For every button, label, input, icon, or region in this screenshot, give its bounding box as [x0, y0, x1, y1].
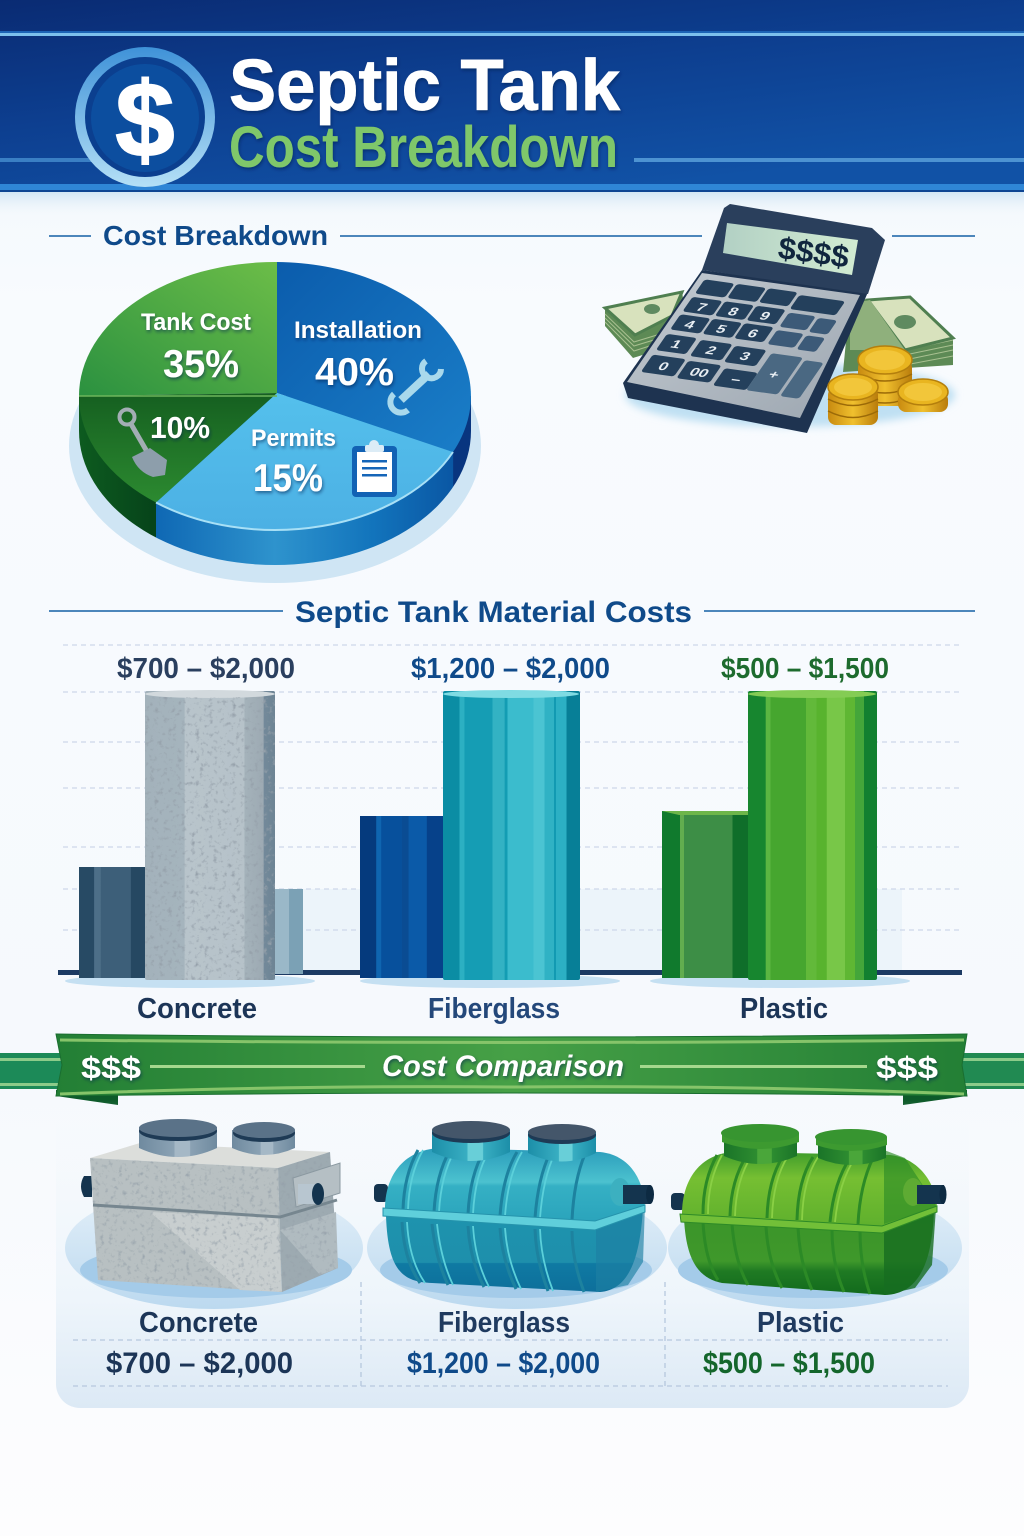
calculator keys: 8	[724, 306, 741, 319]
calculator keys: 2	[702, 344, 719, 358]
ribbon banner: cost comparison: Cost Comparison	[382, 1050, 624, 1083]
pie labels	[141, 309, 422, 500]
calculator keys: 3	[736, 350, 753, 363]
header banner	[0, 0, 1024, 192]
calculator keys	[638, 279, 866, 399]
comparison labels: fiberglass	[407, 1307, 600, 1380]
pie labels: 40%	[315, 351, 394, 394]
slice: other 10%	[79, 393, 277, 502]
calculator keys: −	[727, 374, 744, 387]
calculator keys: 7	[693, 301, 710, 314]
slice: installation 40%	[277, 262, 471, 452]
comparison labels: plastic: $500 – $1,500	[703, 1347, 875, 1380]
icon: dollar coin: $	[116, 61, 174, 179]
axis label: Plastic	[740, 993, 828, 1025]
calculator keys: 00	[686, 366, 712, 380]
calculator body	[623, 270, 868, 433]
illustration: fiberglass tank	[374, 1121, 654, 1292]
value label: $500 – $1,500	[721, 653, 889, 685]
section heading: cost breakdown: Cost Breakdown	[103, 220, 328, 251]
calculator keys: 9	[756, 310, 773, 323]
calculator keys: 0	[655, 361, 672, 374]
pie labels: Installation	[294, 317, 422, 344]
manhole lids	[139, 1119, 295, 1157]
comparison labels: plastic	[703, 1307, 875, 1380]
bars: fiberglass	[360, 653, 610, 1025]
pie labels: Permits	[251, 425, 336, 452]
calculator keys: 6	[744, 328, 761, 341]
illustration: concrete tank	[80, 1119, 350, 1300]
title: Septic Tank	[229, 46, 621, 126]
bars: concrete	[79, 653, 303, 1025]
illustration: calculator with cash and coins	[605, 204, 955, 433]
gold coins	[828, 346, 948, 425]
icon: wrench	[390, 361, 441, 413]
ribbon banner: cost comparison: $$$	[876, 1050, 938, 1085]
comparison labels: concrete	[106, 1307, 293, 1380]
value label: $1,200 – $2,000	[411, 653, 610, 685]
comparison labels: plastic: Plastic	[757, 1307, 844, 1339]
axis label: Concrete	[137, 993, 257, 1025]
pie labels: 35%	[163, 343, 239, 386]
bars: plastic	[662, 653, 889, 1025]
title: Cost Breakdown	[229, 115, 618, 180]
axis label: Fiberglass	[428, 993, 560, 1025]
calculator keys: 4	[681, 319, 699, 332]
ribbon banner: cost comparison	[0, 1034, 1024, 1105]
title	[229, 46, 621, 180]
illustration: calculator with cash and coins: $$$$	[776, 230, 851, 275]
pie labels: Tank Cost	[141, 309, 251, 336]
value label: $700 – $2,000	[117, 653, 295, 685]
manhole lids	[432, 1121, 596, 1162]
icon: shovel	[120, 410, 167, 477]
bar chart: material costs	[58, 645, 962, 1025]
comparison labels: concrete: $700 – $2,000	[106, 1347, 293, 1380]
cash stacks	[605, 292, 953, 372]
illustration: plastic tank	[671, 1124, 946, 1295]
pie labels: 15%	[253, 457, 323, 500]
icon: clipboard	[352, 440, 397, 497]
panel: tank comparison	[56, 1100, 969, 1408]
section heading: material costs: Septic Tank Material Costs	[295, 596, 692, 629]
comparison labels: fiberglass: $1,200 – $2,000	[407, 1347, 600, 1380]
manhole lids	[721, 1124, 887, 1165]
calculator keys: 1	[667, 338, 684, 351]
calculator keys: 5	[712, 323, 729, 336]
calculator keys: +	[765, 369, 782, 382]
slice: tank cost 35%	[79, 262, 277, 396]
icon: dollar coin	[75, 47, 215, 187]
pie labels: 10%	[150, 410, 210, 445]
comparison labels: fiberglass: Fiberglass	[438, 1307, 570, 1339]
ribbon banner: cost comparison: $$$	[81, 1050, 141, 1085]
comparison labels: concrete: Concrete	[139, 1307, 258, 1339]
pie chart	[69, 262, 481, 583]
slice: permits 15%	[156, 393, 453, 530]
